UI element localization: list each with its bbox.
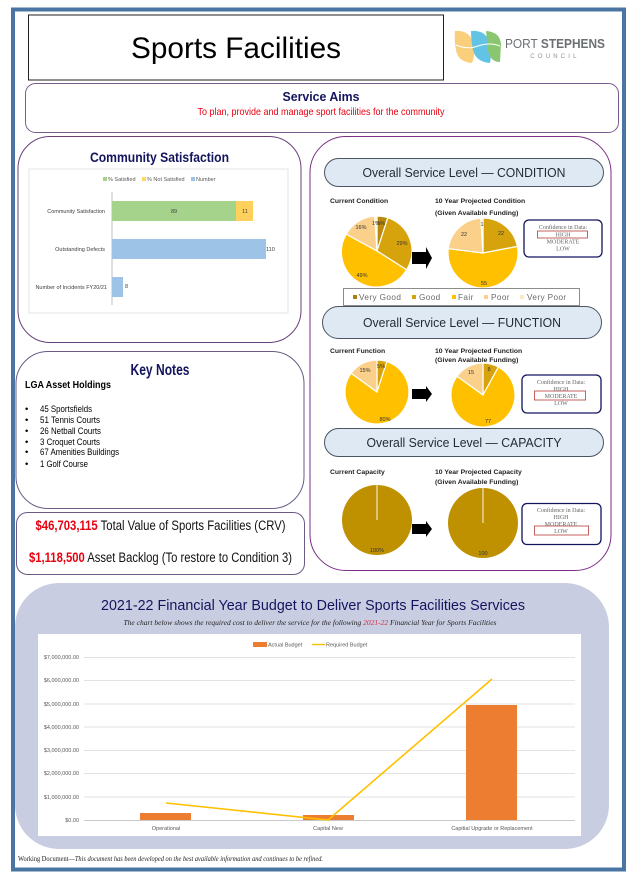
legend: condition ratings: Poor (491, 293, 510, 302)
list: asset holdings: 67 Amenities Buildings (40, 447, 119, 458)
axis labels: $2,000,000.00 (44, 771, 79, 777)
pie: current condition: 5% (377, 221, 385, 227)
category labels (152, 826, 533, 832)
pie: projected function: 77 (485, 419, 491, 425)
bar labels: 110 (266, 247, 275, 253)
category labels: Operational (152, 826, 180, 832)
confidence box: function: MODERATE (545, 394, 578, 400)
panel: key notes (16, 352, 304, 508)
pie: current condition (341, 216, 412, 287)
text: service aims statement: To plan, provide and manage sport facilities for the community (198, 106, 445, 118)
label: current function: Current Function (330, 348, 385, 355)
list: asset holdings: • (25, 404, 28, 415)
bars (112, 201, 266, 297)
heading: key notes: Key Notes (130, 362, 190, 379)
pie: current condition: 16% (355, 225, 367, 231)
text: asset backlog: $1,118,500 Asset Backlog (To restore to Condition 3) (29, 550, 292, 565)
label: current capacity: Current Capacity (330, 469, 385, 476)
axis labels (44, 655, 79, 824)
pie: projected condition (448, 218, 518, 288)
confidence box: condition: HIGH (556, 232, 571, 238)
bar labels: 8 (125, 284, 128, 290)
pie: projected function (451, 363, 515, 427)
heading pill: condition (324, 158, 604, 186)
axis labels: $0.00 (65, 818, 79, 824)
pie: current function: 15% (359, 368, 371, 374)
pie: projected condition: 55 (481, 281, 487, 287)
confidence box: capacity: HIGH (554, 515, 569, 521)
legend: condition ratings: Good (419, 293, 441, 302)
logo: Port Stephens Council: PORT STEPHENS (505, 36, 605, 51)
list: asset holdings: • (25, 415, 28, 426)
chart legend: % Not Satisfied (147, 177, 185, 183)
heading pill: function: Overall Service Level — FUNCTION (363, 316, 561, 330)
legend: condition ratings: Fair (458, 293, 474, 302)
heading pill: capacity: Overall Service Level — CAPACITY (366, 436, 562, 450)
pie: projected function: 15 (468, 370, 474, 376)
pie: current capacity: 100% (370, 548, 384, 554)
chart legend: Required Budget (326, 642, 368, 648)
label: projected function: (Given Available Funding) (435, 357, 518, 364)
category labels: Capitial Upgrade or Replacement (451, 826, 533, 832)
pie: projected condition: 22 (461, 232, 467, 238)
list: asset holdings (25, 404, 119, 470)
heading: budget: 2021-22 Financial Year Budget to Deliver Sports Facilities Services (101, 598, 525, 614)
panel: budget (15, 583, 609, 849)
axis labels: $7,000,000.00 (44, 655, 79, 661)
pie: current condition: 49% (356, 273, 368, 279)
combo chart: budget (38, 634, 581, 836)
panel: asset values (16, 512, 304, 574)
axis labels: $6,000,000.00 (44, 678, 79, 684)
chart legend: Number (196, 177, 216, 183)
logo: Port Stephens Council: COUNCIL (530, 54, 580, 60)
list: asset holdings: • (25, 437, 28, 448)
bar labels: Outstanding Defects (55, 247, 105, 253)
confidence box: function: HIGH (554, 387, 569, 393)
arrow (412, 521, 432, 537)
list: asset holdings: 26 Netball Courts (40, 426, 101, 437)
list: asset holdings: 51 Tennis Courts (40, 415, 100, 426)
label: projected function: 10 Year Projected Function (435, 348, 522, 355)
axis labels: $1,000,000.00 (44, 795, 79, 801)
bar labels: Community Satisfaction (47, 209, 105, 215)
list: asset holdings: • (25, 459, 28, 470)
pie: current condition: 29% (396, 241, 408, 247)
pie: current condition: 1% (372, 221, 380, 227)
pie: current capacity (342, 485, 412, 555)
pie: current function: 80% (379, 417, 391, 423)
pie: projected condition: 1 (480, 222, 484, 228)
category labels: Capital New (313, 826, 343, 832)
list: asset holdings: • (25, 447, 28, 458)
list: asset holdings: 1 Golf Course (40, 459, 88, 470)
confidence box: capacity: Confidence in Data: (537, 507, 585, 514)
bar chart: community satisfaction (29, 169, 288, 313)
text: total value: $46,703,115 Total Value of Sports Facilities (CRV) (36, 518, 286, 533)
pie: projected capacity (448, 488, 518, 558)
confidence box: function: LOW (554, 401, 568, 407)
confidence box: condition: Confidence in Data: (539, 224, 587, 231)
bar labels: 89 (171, 209, 177, 215)
chart legend (253, 642, 368, 648)
label: projected condition: (Given Available Funding) (435, 210, 518, 217)
label: projected capacity: 10 Year Projected Capacity (435, 469, 522, 476)
legend: condition ratings (344, 288, 580, 306)
label: current condition: Current Condition (330, 198, 388, 205)
confidence box: condition: LOW (556, 246, 570, 252)
chart legend (103, 177, 216, 183)
subheading: LGA asset holdings: LGA Asset Holdings (25, 379, 111, 391)
panel: community satisfaction (18, 136, 301, 342)
axis labels: $4,000,000.00 (44, 725, 79, 731)
confidence box: function (522, 375, 601, 413)
legend: condition ratings: Very Good (359, 293, 401, 302)
heading pill: condition: Overall Service Level — CONDITION (362, 166, 566, 180)
footer note: Working Document—This document has been developed on the best available information and continues to be refined. (18, 855, 323, 863)
axis labels: $5,000,000.00 (44, 702, 79, 708)
list: asset holdings: 3 Croquet Courts (40, 437, 100, 448)
heading: community satisfaction: Community Satisfaction (90, 149, 229, 165)
chart legend: % Satisfied (108, 177, 136, 183)
bar labels: Number of Incidents FY20/21 (35, 285, 107, 291)
label: projected condition: 10 Year Projected Condition (435, 198, 525, 205)
pie: projected condition: 22 (498, 231, 504, 237)
heading: service aims: Service Aims (282, 89, 360, 104)
budget bars (140, 705, 517, 820)
confidence box: function: Confidence in Data: (537, 379, 585, 386)
arrow (412, 247, 432, 269)
text: budget subtitle: The chart below shows the required cost to deliver the service for the following 2021-22 Financial Year for Sports Facilities (124, 618, 497, 627)
confidence box: capacity: MODERATE (545, 522, 578, 528)
logo: Port Stephens Council (455, 31, 605, 63)
required budget line (166, 679, 492, 820)
list: asset holdings: • (25, 426, 28, 437)
confidence box: capacity (522, 504, 601, 544)
panel: service aims (26, 84, 618, 132)
label: projected capacity: (Given Available Funding) (435, 479, 518, 486)
pie: projected function: 8 (487, 367, 491, 373)
arrow (412, 386, 432, 402)
pie: current function: 5% (377, 364, 385, 370)
panel: overall service level (310, 136, 611, 570)
list: asset holdings: 45 Sportsfields (40, 404, 92, 415)
heading pill: capacity (324, 428, 604, 456)
pie: current function (345, 360, 409, 424)
title: Sports Facilities (131, 32, 341, 65)
pie: projected capacity: 100 (478, 551, 488, 557)
chart legend: Actual Budget (268, 642, 303, 648)
confidence box: capacity: LOW (554, 529, 568, 535)
confidence box: condition (524, 220, 602, 257)
axis labels: $3,000,000.00 (44, 748, 79, 754)
heading pill: function (322, 306, 602, 338)
legend: condition ratings: Very Poor (527, 293, 567, 302)
title (28, 15, 444, 80)
confidence box: condition: MODERATE (547, 240, 580, 246)
bar labels (35, 209, 275, 291)
bar labels: 11 (242, 209, 248, 215)
